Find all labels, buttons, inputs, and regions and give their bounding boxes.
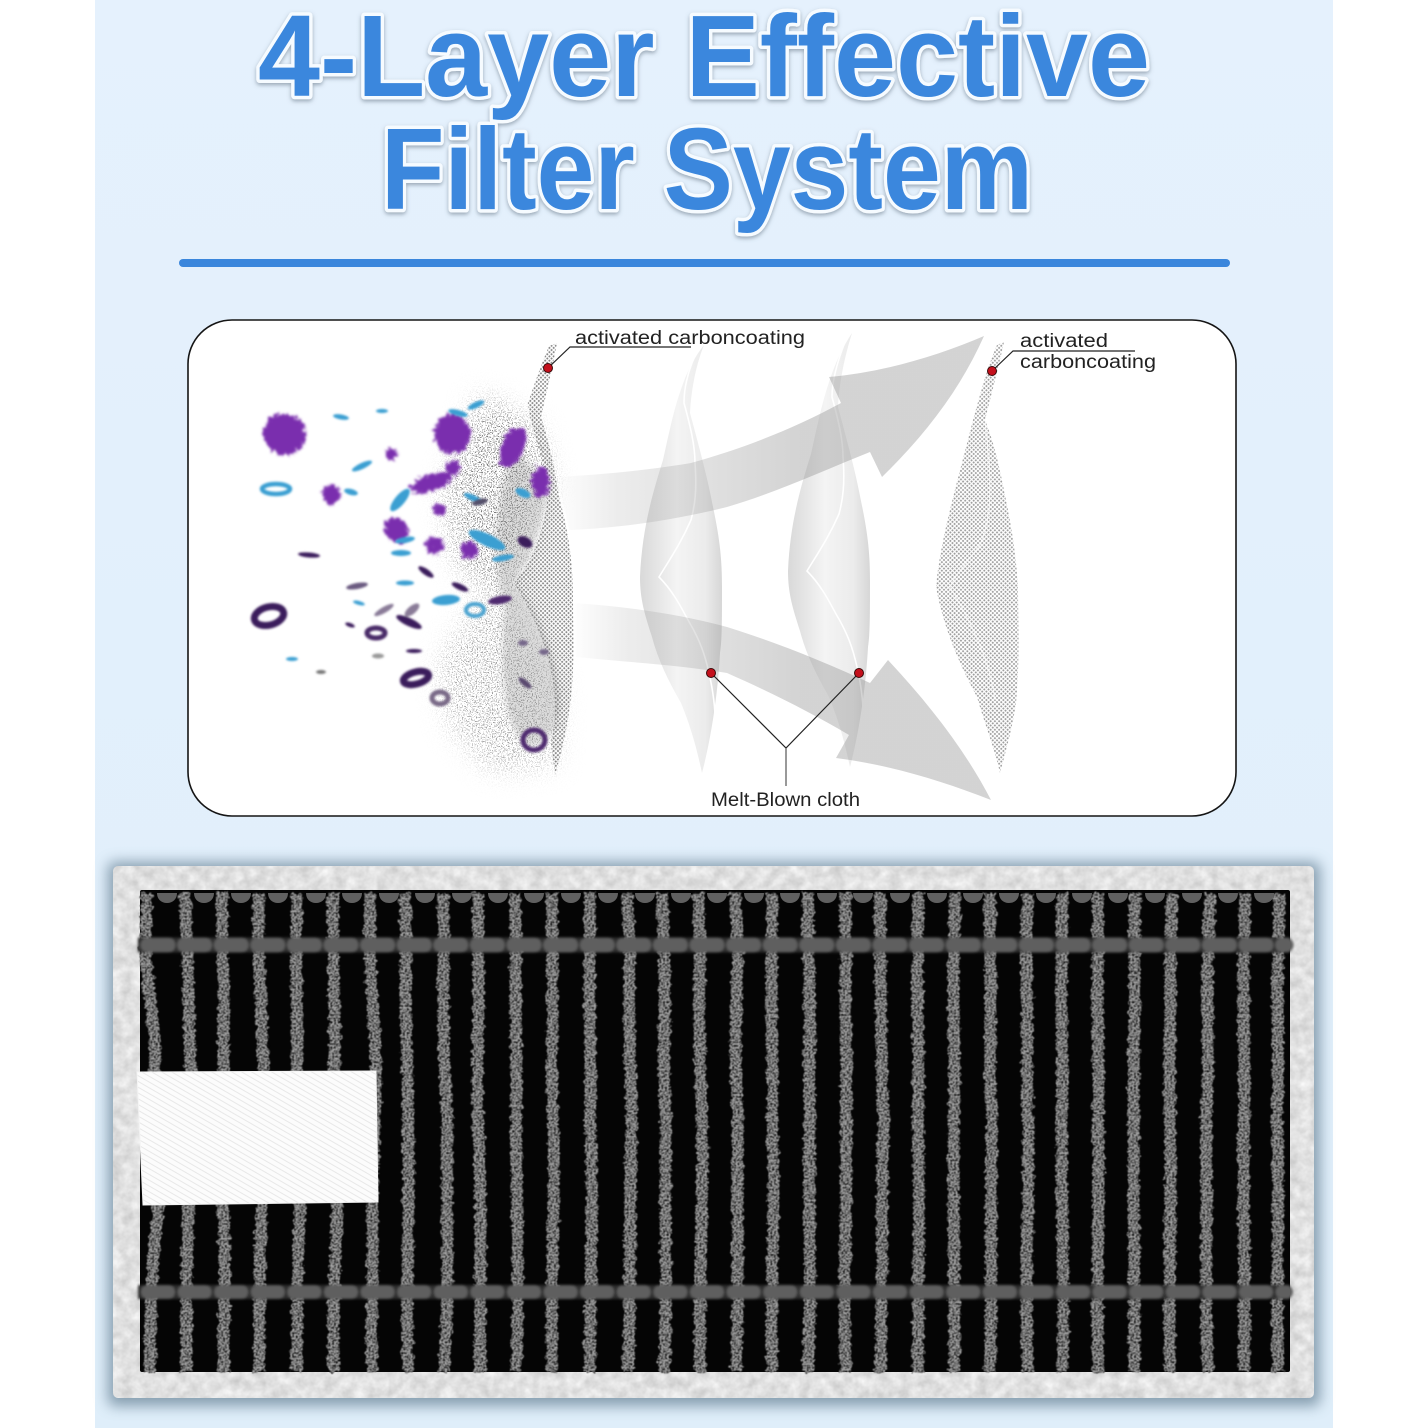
particles: dark flecks	[298, 497, 549, 690]
callout: melt-blown cloth	[706, 668, 864, 811]
callout: activated carboncoating right: carboncoating	[1020, 352, 1156, 373]
particles: rings	[252, 484, 545, 750]
mesh layer 4: activated carbon coating	[936, 342, 1018, 773]
filter pleats	[145, 893, 1280, 1372]
title divider line	[179, 259, 1230, 267]
white pull tab	[137, 1071, 378, 1205]
mesh layer 1: activated carbon coating	[514, 343, 573, 775]
callout: activated carboncoating left: activated carboncoating	[575, 328, 805, 349]
filter top support band	[138, 938, 1290, 952]
photo: pleated filter	[113, 866, 1314, 1398]
filter bottom support band	[138, 1285, 1290, 1299]
arrow: upper airflow	[555, 336, 984, 530]
callout: activated carboncoating left	[544, 328, 805, 372]
cloth layer 2: melt-blown	[640, 345, 722, 773]
particles: purple blobs	[261, 411, 548, 556]
panel: filter layers diagram	[188, 320, 1236, 816]
filter frame shadow	[108, 862, 1320, 1406]
dust stipple	[440, 395, 558, 770]
filter black interior	[140, 890, 1290, 1372]
arrow: lower airflow	[573, 603, 991, 800]
cloth layer 3: melt-blown	[788, 333, 870, 767]
filter top scallops	[157, 893, 1274, 903]
callout: activated carboncoating right	[988, 331, 1156, 376]
callout: melt-blown cloth: Melt-Blown cloth	[711, 790, 860, 811]
particles: blue flecks	[286, 398, 532, 661]
filter felt frame	[113, 866, 1314, 1398]
callout: activated carboncoating right: activated	[1020, 331, 1108, 352]
dust haze behind first layer	[496, 450, 560, 746]
title: Filter System	[381, 104, 1033, 234]
title	[258, 0, 1150, 234]
